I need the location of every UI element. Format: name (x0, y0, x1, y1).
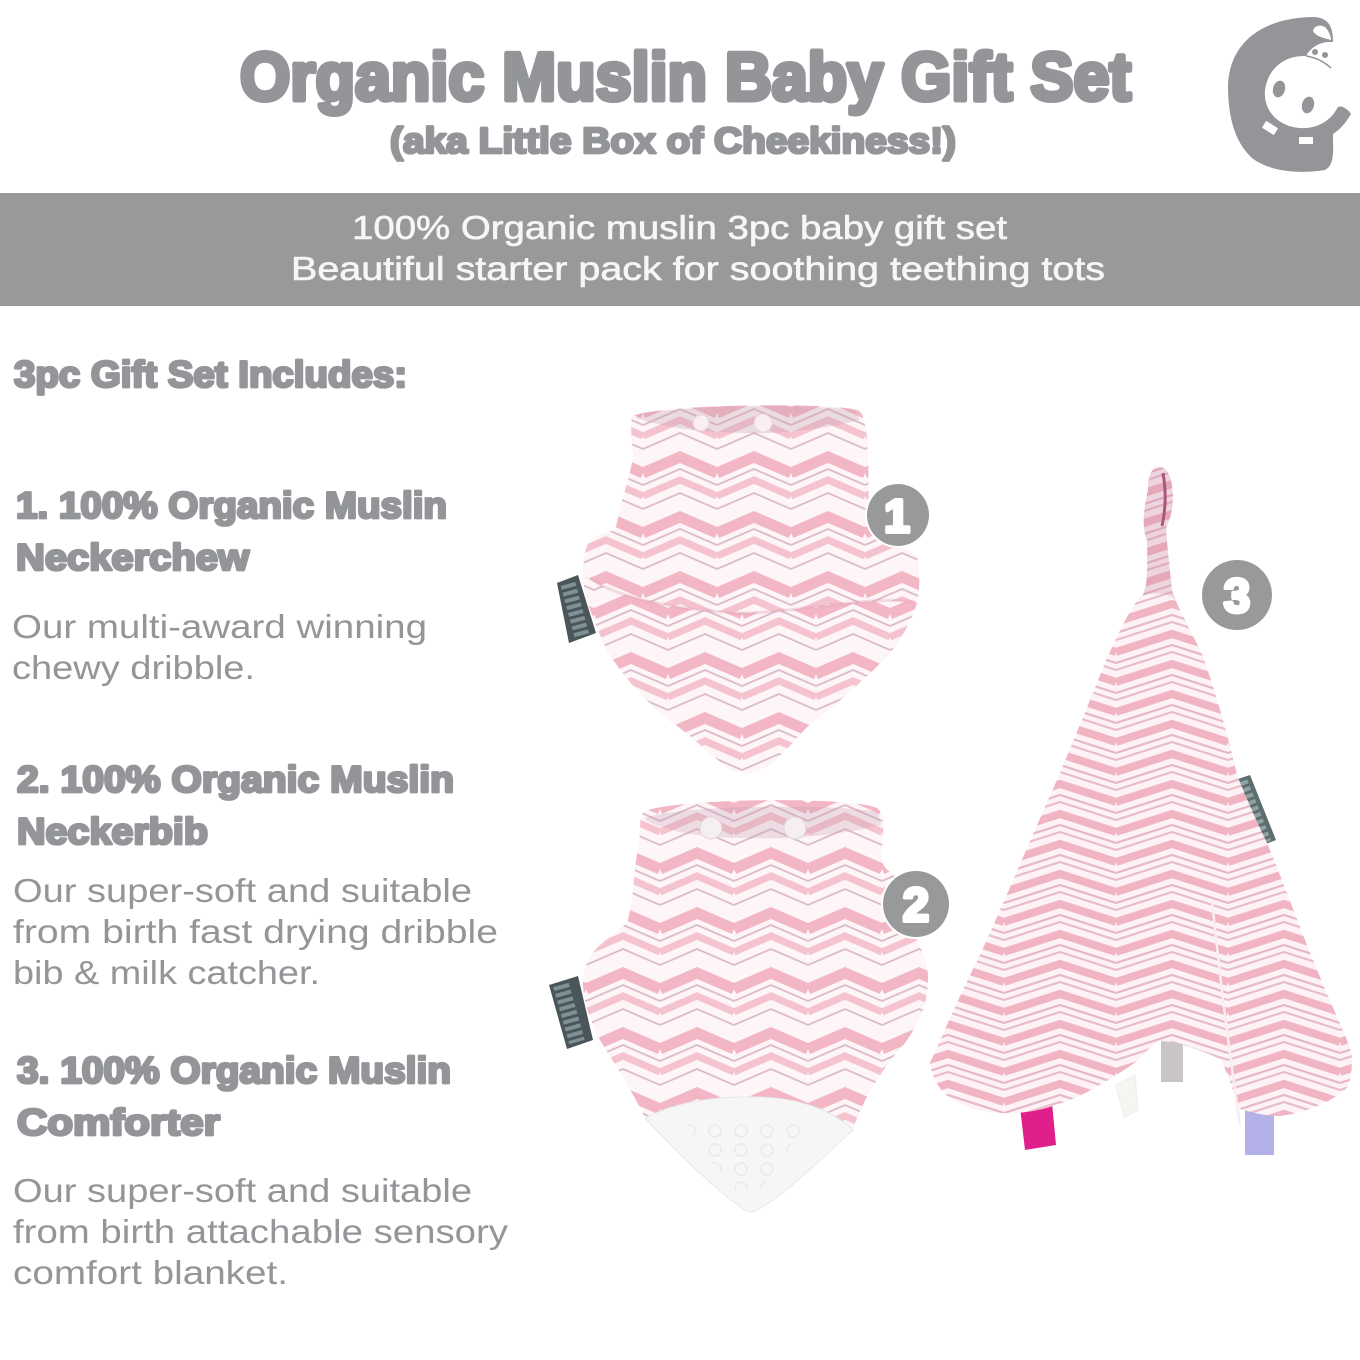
item 3 description: from birth attachable sensory (13, 1213, 509, 1250)
number badge 1: 1 (884, 490, 910, 542)
grey tag (1161, 1035, 1183, 1082)
item 2 description: Our super-soft and suitable (13, 872, 472, 909)
item 2 description (13, 872, 498, 991)
comforter loop (1138, 467, 1180, 612)
comforter label tag (1235, 775, 1276, 847)
item 3 heading: Comforter (17, 1102, 220, 1143)
icon: hippo logo (1228, 17, 1360, 172)
comforter body (930, 594, 1352, 1116)
number badge 3: 3 (1224, 569, 1250, 622)
item 1 heading: Neckerchew (16, 537, 249, 578)
item 3 heading (17, 1050, 451, 1143)
item 1 description (12, 608, 427, 686)
item 1 heading (16, 485, 447, 578)
comforter illustration (930, 467, 1352, 1155)
lavender tag (1245, 1105, 1274, 1155)
item 2 text (13, 759, 498, 991)
item 2 heading (17, 759, 454, 852)
item 3 text (13, 1050, 509, 1291)
pink tag (1020, 1103, 1056, 1150)
bib 1 snaps (693, 414, 772, 432)
bib label tag (557, 575, 596, 643)
item 3 description (13, 1172, 509, 1291)
subtitle: (aka Little Box of Cheekiness!) (390, 120, 956, 161)
banner line 2: Beautiful starter pack for soothing teething tots (291, 250, 1105, 287)
item 1 text (12, 485, 447, 686)
neckerchew bib illustration (557, 405, 919, 773)
bib 2 collar opening (645, 807, 881, 838)
item 2 heading: Neckerbib (17, 811, 208, 852)
number badge 2: 2 (903, 878, 929, 931)
bib 2 body (583, 800, 928, 1140)
bib 1 body (583, 405, 919, 773)
bib 1 lower drape (583, 577, 917, 773)
bib 1 fold shading (590, 578, 915, 613)
item 1 description: chewy dribble. (12, 649, 255, 686)
item 2 description: bib & milk catcher. (13, 954, 320, 991)
bib label tag (549, 976, 593, 1049)
bib 2 snaps (700, 817, 806, 839)
number badge 2 (881, 869, 951, 939)
item 3 description: Our super-soft and suitable (13, 1172, 472, 1209)
item 3 heading: 3. 100% Organic Muslin (17, 1050, 451, 1091)
item 1 heading: 1. 100% Organic Muslin (16, 485, 447, 526)
bib 1 collar opening (636, 406, 860, 433)
neckerbib illustration (549, 800, 928, 1212)
banner (0, 193, 1360, 306)
item 1 description: Our multi-award winning (12, 608, 427, 645)
banner line 1: 100% Organic muslin 3pc baby gift set (352, 209, 1007, 246)
title: Organic Muslin Baby Gift Set (240, 39, 1131, 115)
teether (645, 1097, 853, 1212)
number badge 3 (1202, 560, 1272, 630)
white tag (1116, 1075, 1138, 1118)
item 2 heading: 2. 100% Organic Muslin (17, 759, 454, 800)
section heading: 3pc Gift Set Includes: (14, 354, 407, 395)
item 3 description: comfort blanket. (13, 1254, 288, 1291)
item 2 description: from birth fast drying dribble (13, 913, 498, 950)
comforter seam (1212, 900, 1240, 1125)
sensory tags (1020, 1035, 1274, 1155)
number badge 1 (865, 482, 931, 548)
